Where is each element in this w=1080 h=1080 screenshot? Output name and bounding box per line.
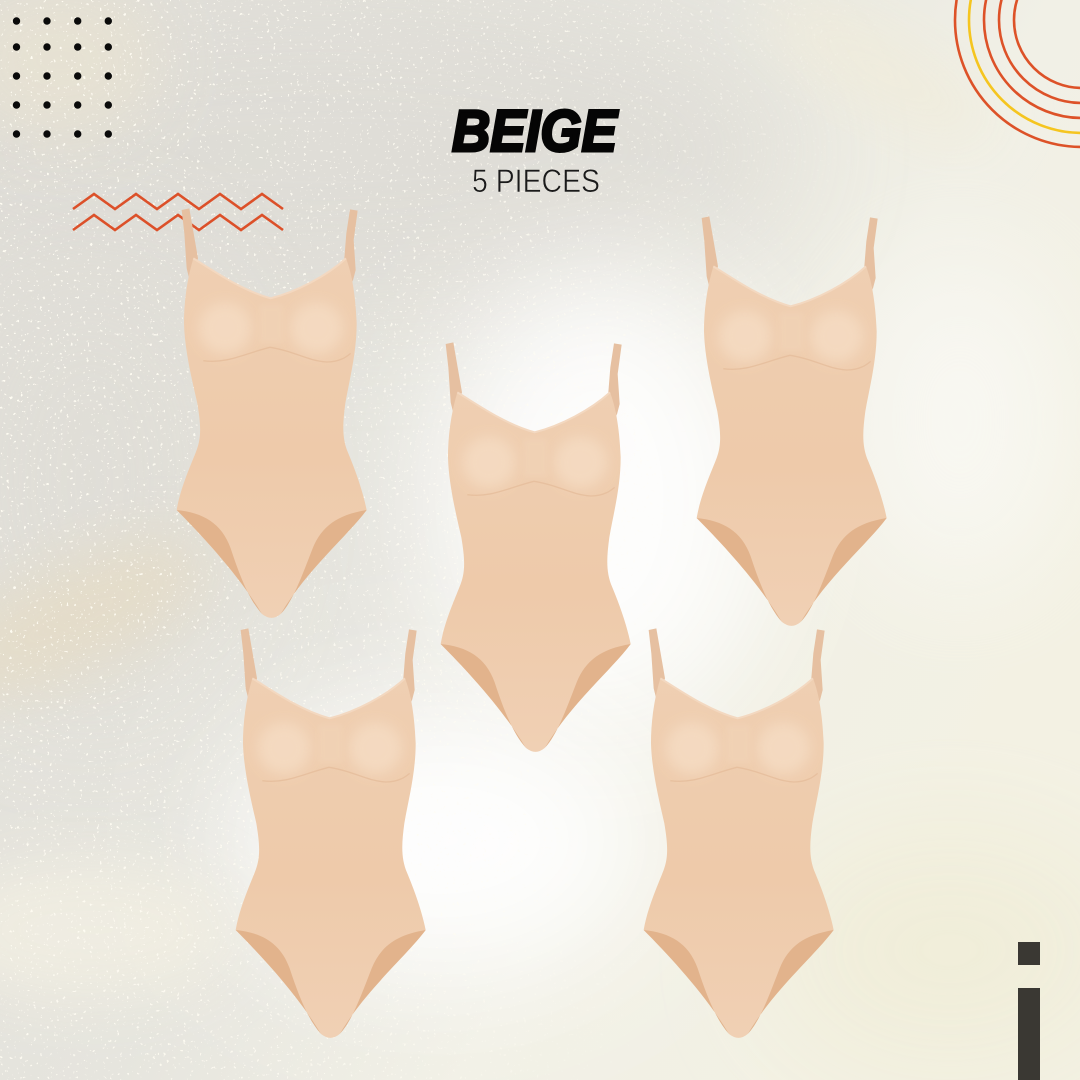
dot grid: [13, 17, 112, 138]
bodysuit: bottom left: [236, 628, 426, 1038]
bodysuit: top right: [697, 216, 887, 626]
zigzag lines: [73, 194, 283, 230]
bodysuit: top left: [177, 208, 367, 618]
bodysuit: centre: [441, 342, 631, 752]
title: BEIGE: [452, 99, 619, 164]
icon: info i: [1018, 942, 1040, 1080]
concentric arcs: [955, 0, 1080, 147]
bodysuit: bottom right: [644, 628, 834, 1038]
subtitle: 5 PIECES: [472, 163, 600, 199]
